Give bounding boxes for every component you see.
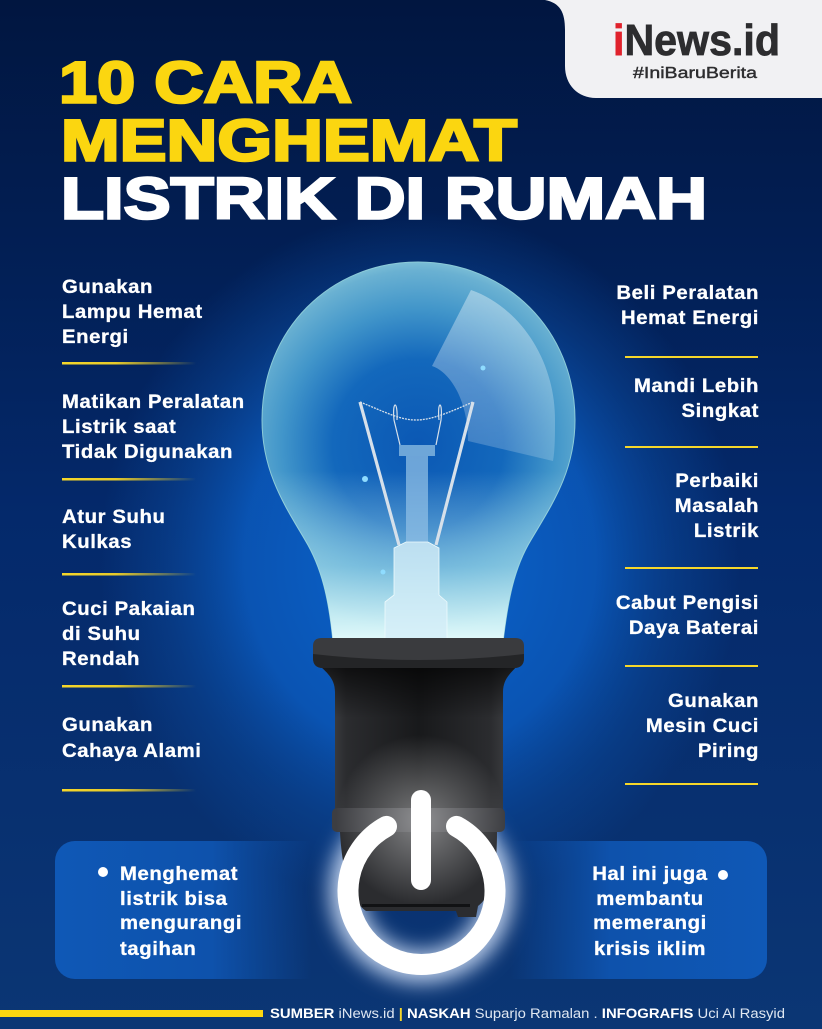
tip 7: Singkat	[682, 401, 759, 422]
tip 10: Mesin Cuci	[646, 716, 759, 737]
left tips	[62, 277, 245, 792]
sparks	[362, 366, 486, 574]
power bar	[411, 790, 431, 890]
right tips	[616, 283, 759, 785]
tip 3: Kulkas	[62, 532, 132, 553]
tip 5: Cahaya Alami	[62, 741, 202, 762]
tip 5: Gunakan	[62, 715, 153, 736]
callout: left: mengurangi	[120, 913, 242, 934]
power glow	[346, 815, 498, 967]
logo tagline: #IniBaruBerita	[633, 65, 757, 82]
tip 1: Gunakan	[62, 277, 153, 298]
title: MENGHEMAT	[61, 109, 517, 174]
tip 7: Mandi Lebih	[634, 376, 759, 397]
tip 8: Perbaiki	[675, 471, 759, 492]
callout: left: listrik bisa	[120, 889, 228, 910]
tip 4: Rendah	[62, 649, 140, 670]
tip 10: Gunakan	[668, 691, 759, 712]
callout: left: tagihan	[120, 939, 196, 960]
title: LISTRIK DI RUMAH	[61, 167, 707, 232]
logo wordmark: iNews.id	[613, 16, 780, 65]
tip 1: Lampu Hemat	[62, 302, 203, 323]
tip 2: Listrik saat	[62, 417, 176, 438]
tip 4: Cuci Pakaian	[62, 599, 195, 620]
socket body	[318, 664, 519, 813]
socket collar	[313, 638, 524, 668]
tip 9: Cabut Pengisi	[616, 593, 759, 614]
tip 4: di Suhu	[62, 624, 141, 645]
callout: left: Menghemat	[120, 864, 238, 885]
bulb socket	[313, 638, 524, 917]
tip 2: Tidak Digunakan	[62, 442, 233, 463]
socket base	[340, 832, 497, 917]
filament support wires	[360, 402, 473, 545]
footer	[0, 1006, 785, 1021]
power icon	[348, 790, 495, 965]
tip 9: Daya Baterai	[629, 618, 759, 639]
tip 6: Hemat Energi	[621, 308, 759, 329]
socket ring	[332, 808, 505, 832]
title	[59, 51, 707, 232]
tip 2: Matikan Peralatan	[62, 392, 245, 413]
power ring	[348, 826, 495, 965]
tip 3: Atur Suhu	[62, 507, 165, 528]
panel: bottom summary	[55, 841, 767, 979]
callout: left	[98, 864, 242, 960]
callout: right	[592, 864, 728, 960]
title: 10 CARA	[59, 51, 352, 116]
tip 6: Beli Peralatan	[616, 283, 759, 304]
tip 1: Energi	[62, 327, 129, 348]
callout: right: memerangi	[593, 913, 707, 934]
footer: SUMBER iNews.id | NASKAH Suparjo Ramalan . INFOGRAFIS Uci Al Rasyid	[270, 1006, 785, 1021]
glass reflection	[432, 290, 555, 461]
glass stem	[385, 445, 447, 642]
light bulb	[262, 262, 575, 642]
tip 8: Listrik	[694, 521, 759, 542]
bulb glass	[262, 262, 575, 642]
callout: right: Hal ini juga	[592, 864, 708, 885]
tip 8: Masalah	[675, 496, 759, 517]
callout: right: krisis iklim	[594, 939, 706, 960]
logo panel	[545, 0, 822, 98]
tip 10: Piring	[698, 741, 759, 762]
callout: right: membantu	[596, 889, 704, 910]
